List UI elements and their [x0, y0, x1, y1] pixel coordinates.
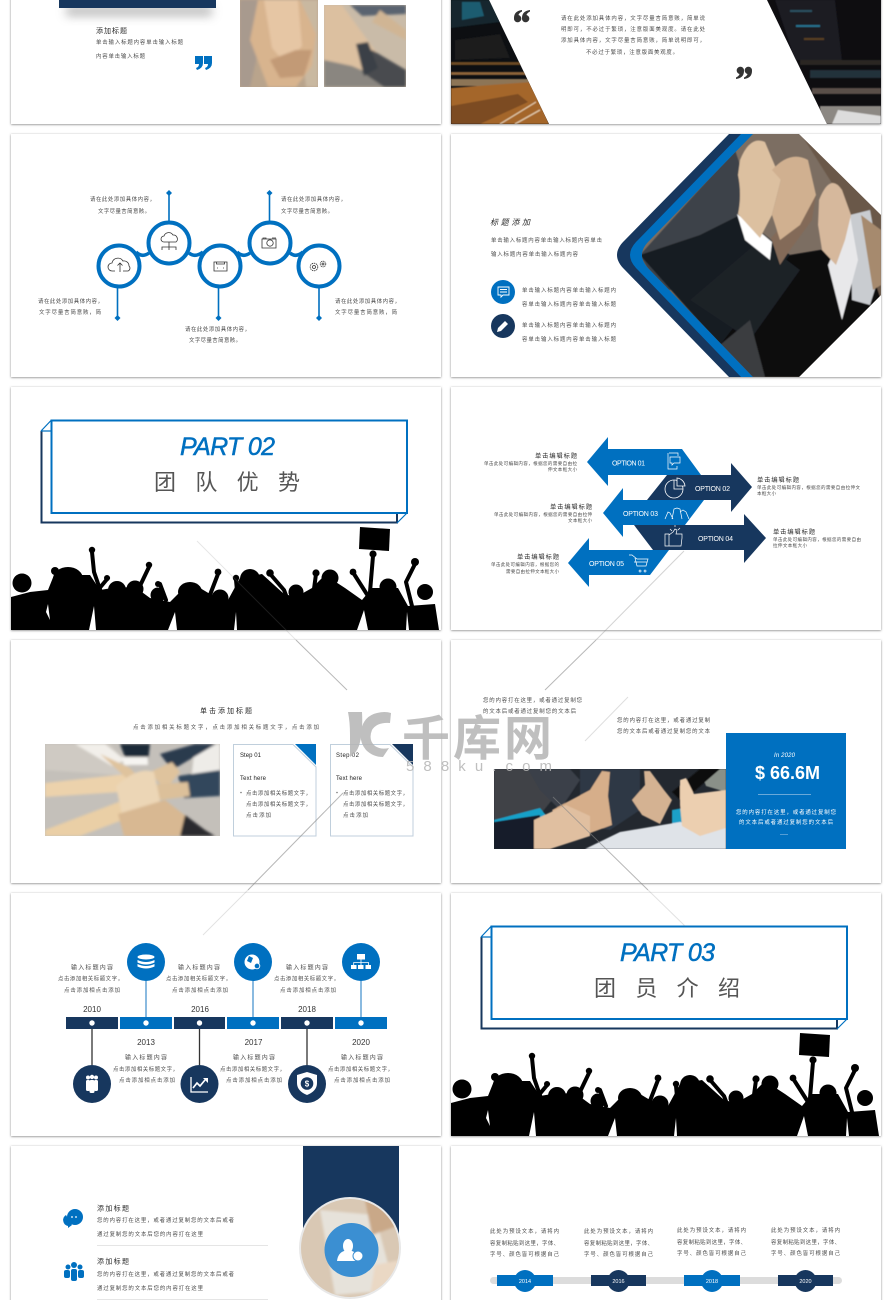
- quote text: 添加具体内容，文字尽量言简意赅，简单说明即可，: [561, 36, 705, 44]
- icon: pie chart: [665, 478, 685, 498]
- label 4: 拉伸文本框大小: [773, 542, 808, 549]
- watermark logo mark: [348, 712, 391, 757]
- watermark: 千库网 588ku.com: [348, 712, 552, 775]
- label 5: 需要自由拉伸文本框大小: [506, 568, 560, 575]
- labels: 请在此处添加具体内容，: [281, 195, 346, 203]
- labels: 文字尽量言简意赅，简: [39, 308, 101, 316]
- icon: line chart: [180, 1065, 218, 1103]
- arrow labels: OPTION 04: [698, 536, 733, 543]
- column text 3: [677, 1226, 747, 1257]
- text block 2: [617, 716, 711, 735]
- column text 4: [771, 1226, 841, 1257]
- column text 3: 容复制粘贴到这里，字体、: [677, 1238, 746, 1246]
- icon: database: [127, 943, 165, 981]
- column text 3: 字号、颜色皆可根据自己: [677, 1249, 747, 1257]
- icon: camera: [262, 238, 276, 248]
- photo: thumbs up: [494, 769, 726, 849]
- arrow: option 04: [634, 514, 766, 563]
- item text 2: 单击输入标题内容单击输入标题内: [522, 321, 616, 329]
- marker 2016: 2016: [612, 1279, 625, 1285]
- marker 2020: [778, 1270, 833, 1292]
- labels: 请在此处添加具体内容，: [38, 297, 103, 305]
- progress track: [490, 1277, 842, 1284]
- arrow labels: OPTION 05: [589, 561, 624, 568]
- description text: [491, 236, 603, 258]
- text block 1: 您的内容打在这里，或者通过复制您: [483, 696, 583, 704]
- upper labels: 输入标题内容: [178, 964, 220, 972]
- subtitle: 团员介绍: 团员介绍: [594, 976, 740, 1001]
- marker 2018: 2018: [706, 1279, 718, 1285]
- lower labels: 点击添加相关标题文字，: [113, 1065, 178, 1073]
- arrow: option 01: [587, 437, 701, 486]
- label 4: 单击编辑标题: [773, 528, 815, 536]
- arrow labels: OPTION 01: [612, 460, 645, 468]
- column text 1: [490, 1227, 560, 1258]
- card: step 02: [330, 744, 413, 836]
- marker 2016: [591, 1270, 646, 1292]
- timeline bar: [66, 981, 387, 1065]
- item text 2: 容单击输入标题内容单击输入标题: [522, 335, 617, 343]
- heading: 单击添加标题: [200, 706, 252, 715]
- circle photo: [299, 1197, 401, 1299]
- marker 2014: 2014: [519, 1279, 531, 1285]
- photo: team hands: [45, 744, 220, 836]
- box body text: 您的内容打在这里，或者通过复制您: [736, 808, 837, 816]
- body text: [96, 38, 184, 60]
- text block 2: 您的文本后或者通过复制您的文本: [617, 727, 711, 735]
- photo: wrist with watch: [324, 5, 406, 87]
- heading: 标题添加: 标题添加: [490, 218, 531, 227]
- photo: stacked hands: [240, 0, 318, 87]
- text block 1: [483, 696, 583, 715]
- upper labels: 输入标题内容: [71, 964, 113, 972]
- card: step 02: Step 02: [336, 753, 360, 759]
- marker 2014: [497, 1270, 553, 1292]
- watermark wordmark: 千库网: [402, 713, 552, 766]
- subheading: 点击添加相关标题文字，点击添加相关标题文字，点击添加: [133, 723, 319, 731]
- years: 2017: [245, 1038, 263, 1047]
- upper labels: 点击添加相点击添加: [64, 986, 120, 994]
- card: step 01: Step 01: [240, 753, 262, 759]
- lower labels: 输入标题内容: [341, 1054, 383, 1062]
- labels: 文字尽量言简意赅。: [98, 207, 150, 215]
- slide: five option arrows: [451, 387, 881, 630]
- label 2: 本框大小: [757, 490, 776, 497]
- labels: 文字尽量言简意赅。: [281, 207, 333, 215]
- quote text: 明即可，不必过于繁琐，注意版面美观度。请在此处: [561, 25, 706, 33]
- item 2: [97, 1256, 268, 1300]
- labels: 文字尽量言简意赅，简: [335, 308, 397, 316]
- item text 1: [522, 286, 617, 308]
- marker 2020: 2020: [799, 1279, 812, 1285]
- column text 4: 字号、颜色皆可根据自己: [771, 1249, 841, 1257]
- description text: 单击输入标题内容单击输入标题内容单击: [491, 236, 603, 244]
- photo: night city left: [451, 0, 551, 124]
- column text 1: 字号、颜色皆可根据自己: [490, 1250, 560, 1258]
- upper labels: 点击添加相关标题文字，: [58, 974, 123, 982]
- icon: gears: [310, 261, 326, 271]
- slide: diamond photo: [451, 134, 881, 377]
- icon: opening quote: [514, 10, 530, 22]
- quote text: 请在此处添加具体内容，文字尽量言简意赅，简单说: [561, 14, 706, 22]
- column text 3: 此处为预设文本，请将内: [677, 1226, 746, 1234]
- card: step 01: Text here: [240, 776, 267, 782]
- card: step 02: Text here: [336, 776, 363, 782]
- card: step 02: 点击添加相关标题文字，: [343, 789, 408, 797]
- years: [83, 1005, 370, 1047]
- body text: 单击输入标题内容单击输入标题: [96, 38, 184, 46]
- icon: chat bubbles: [63, 1209, 83, 1228]
- slide: city quote: [451, 0, 881, 124]
- lower labels: 点击添加相关标题文字，: [328, 1065, 393, 1073]
- labels: 请在此处添加具体内容，: [335, 297, 400, 305]
- years: 2018: [298, 1005, 316, 1014]
- card: step 01: 点击添加相关标题文字，: [246, 800, 311, 808]
- item 2: 添加标题: [97, 1256, 129, 1266]
- subtitle: 团队优势: 团队优势: [154, 470, 300, 495]
- text block 2: 您的内容打在这里，或者通过复制: [617, 716, 710, 724]
- label 1: [484, 452, 578, 473]
- column text 2: 此处为预设文本，请将内: [584, 1227, 653, 1235]
- labels: 文字尽量言简意赅。: [189, 336, 241, 344]
- card: step 02: 点击添加相关标题文字，: [343, 800, 408, 808]
- title: PART 02: PART 02: [180, 433, 275, 461]
- crowd silhouette: [451, 1033, 879, 1136]
- label 3: [494, 503, 592, 524]
- item 1: 通过复制您的文本后您的内容打在这里: [97, 1230, 204, 1238]
- arrow labels: OPTION 03: [623, 511, 658, 518]
- icon: globe search: [234, 943, 272, 981]
- panel: blue statistic box: [726, 733, 846, 849]
- item 1: [97, 1204, 268, 1246]
- label 3: 文本框大小: [568, 517, 592, 524]
- label 3: 单击编辑标题: [550, 503, 592, 511]
- icon: message bubble: [491, 280, 515, 304]
- column text 2: 字号、颜色皆可根据自己: [584, 1250, 654, 1258]
- card: step 01: 点击添加相关标题文字，: [246, 789, 311, 797]
- arrow: option 03: [603, 488, 704, 537]
- frame: offset box: [481, 926, 847, 1029]
- quote text: [561, 14, 706, 56]
- icon: closing quote: [736, 67, 752, 79]
- column text 4: 容复制粘贴到这里，字体、: [771, 1238, 840, 1246]
- diamond frame blue: [630, 134, 770, 377]
- lower labels: 点击添加相关标题文字，: [220, 1065, 285, 1073]
- label 1: 单击此处可编辑内容，根据您的需要自由拉: [484, 460, 578, 467]
- item text 1: 单击输入标题内容单击输入标题内: [522, 286, 616, 294]
- slide: revenue with photo: [451, 640, 881, 883]
- watermark diagonal lines: [197, 541, 685, 935]
- upper labels: 点击添加相关标题文字，: [166, 974, 231, 982]
- icon: shield dollar: [288, 1065, 326, 1103]
- slide: quote card with photos: [11, 0, 441, 124]
- label 2: 单击编辑标题: [757, 476, 799, 484]
- lower labels: 输入标题内容: [125, 1054, 167, 1062]
- crowd silhouette: [11, 527, 439, 630]
- slide: team member: [11, 1146, 441, 1300]
- arrow: option 02: [647, 463, 752, 512]
- icon: camera lens: [267, 240, 273, 246]
- column text 4: 此处为预设文本，请将内: [771, 1226, 840, 1234]
- inner blue circle: [324, 1223, 378, 1277]
- description text: 输入标题内容单击输入标题内容: [491, 250, 579, 258]
- column text 1: 此处为预设文本，请将内: [490, 1227, 559, 1235]
- item text 1: 容单击输入标题内容单击输入标题: [522, 300, 617, 308]
- label 5: [491, 553, 560, 575]
- label 1: 伸文本框大小: [548, 466, 578, 473]
- arrow: option 05: [568, 538, 669, 587]
- frame: offset box: [41, 420, 407, 523]
- quote text: 不必过于繁琐，注意版面美观度。: [586, 48, 678, 56]
- box body text: [736, 808, 837, 826]
- icon: thumbs up: [665, 525, 682, 546]
- diamond frame navy: [617, 134, 770, 377]
- card: step 01: [234, 744, 316, 836]
- icon: closing quote: [195, 56, 212, 70]
- slide: PART 03: [451, 893, 881, 1136]
- marker 2018: [684, 1270, 740, 1292]
- navy column: [303, 1146, 399, 1248]
- box body text: 的文本后或者通过复制您的文本后: [739, 818, 834, 826]
- big number: $ 66.6M: [755, 763, 820, 783]
- column text 2: 容复制粘贴到这里，字体、: [584, 1239, 653, 1247]
- body text: 内容单击输入标题: [96, 52, 146, 60]
- text block 1: 的文本后或者通过复制您的文本后: [483, 707, 577, 715]
- photo: night city right: [767, 0, 881, 124]
- circle chain: [98, 190, 340, 321]
- icon: shield dollar: $: [305, 1080, 310, 1088]
- icon: people: [73, 1065, 111, 1103]
- label 3: 单击此处可编辑内容，根据您的需要自由拉伸: [494, 511, 592, 518]
- lower labels: 点击添加相点击添加: [119, 1076, 175, 1084]
- label 2: [757, 476, 860, 497]
- lower labels: 输入标题内容: [233, 1054, 275, 1062]
- arrow labels: [589, 460, 733, 568]
- years: 2013: [137, 1038, 155, 1047]
- card: step 01: 点击添加: [246, 811, 271, 819]
- icon: people: [665, 508, 689, 519]
- labels: 请在此处添加具体内容，: [90, 195, 155, 203]
- card: step 02: 点击添加: [343, 811, 368, 819]
- arrow labels: OPTION 02: [695, 486, 730, 493]
- item text 2: [522, 321, 617, 343]
- navy header bar with shadow: [59, 0, 216, 16]
- watermark url: 588ku.com: [406, 758, 552, 775]
- item 1: 添加标题: [97, 1204, 129, 1212]
- slide: steps with photo: [11, 640, 441, 883]
- icon: phone chat: [668, 453, 680, 469]
- lower labels: 点击添加相点击添加: [226, 1076, 282, 1084]
- label 2: 单击此处可编辑内容，根据您的需要自由拉伸文: [757, 484, 860, 491]
- years: 2016: [191, 1005, 209, 1014]
- icon: org chart: [342, 943, 380, 981]
- icon: pencil: [491, 314, 515, 338]
- icon: cloud network: [161, 233, 177, 250]
- item 1: 您的内容打在这里，或者通过复制您的文本后或者: [97, 1216, 235, 1224]
- upper labels: 点击添加相点击添加: [172, 986, 228, 994]
- upper labels: 输入标题内容: [286, 964, 328, 972]
- photo: raised fists: [640, 134, 881, 377]
- label 5: 单击此处可编辑内容，根据您的: [491, 561, 560, 568]
- slide: PART 02: [11, 387, 441, 630]
- slide: five circle process: [11, 134, 441, 377]
- item 2: 通过复制您的文本后您的内容打在这里: [97, 1284, 204, 1292]
- years: 2020: [352, 1038, 370, 1047]
- heading: 添加标题: 添加标题: [96, 26, 127, 35]
- icon: cloud upload: [108, 258, 130, 272]
- lower labels: 点击添加相点击添加: [334, 1076, 390, 1084]
- labels: 请在此处添加具体内容，: [185, 325, 250, 333]
- year label: In 2020: [774, 753, 796, 759]
- label 4: [773, 528, 861, 549]
- slide: year progress: [451, 1146, 881, 1300]
- slide: timeline: [11, 893, 441, 1136]
- upper labels: [58, 964, 339, 994]
- icon: cassette: [214, 262, 227, 271]
- column text 1: 容复制粘贴到这里，字体、: [490, 1239, 559, 1247]
- label 1: 单击编辑标题: [535, 452, 577, 460]
- years: 2010: [83, 1005, 101, 1014]
- upper labels: 点击添加相点击添加: [280, 986, 336, 994]
- icon: group of people: [64, 1262, 84, 1281]
- item 2: 您的内容打在这里，或者通过复制您的文本后或者: [97, 1270, 235, 1278]
- label 5: 单击编辑标题: [517, 553, 559, 561]
- label 4: 单击此处可编辑内容，根据您的需要自由: [773, 536, 861, 543]
- icon: shopping cart: [629, 555, 648, 572]
- lower labels: [113, 1054, 393, 1084]
- icon: person with check: [337, 1239, 363, 1261]
- title: PART 03: PART 03: [620, 939, 715, 967]
- column text 2: [584, 1227, 654, 1258]
- upper labels: 点击添加相关标题文字，: [274, 974, 339, 982]
- labels: [38, 195, 400, 344]
